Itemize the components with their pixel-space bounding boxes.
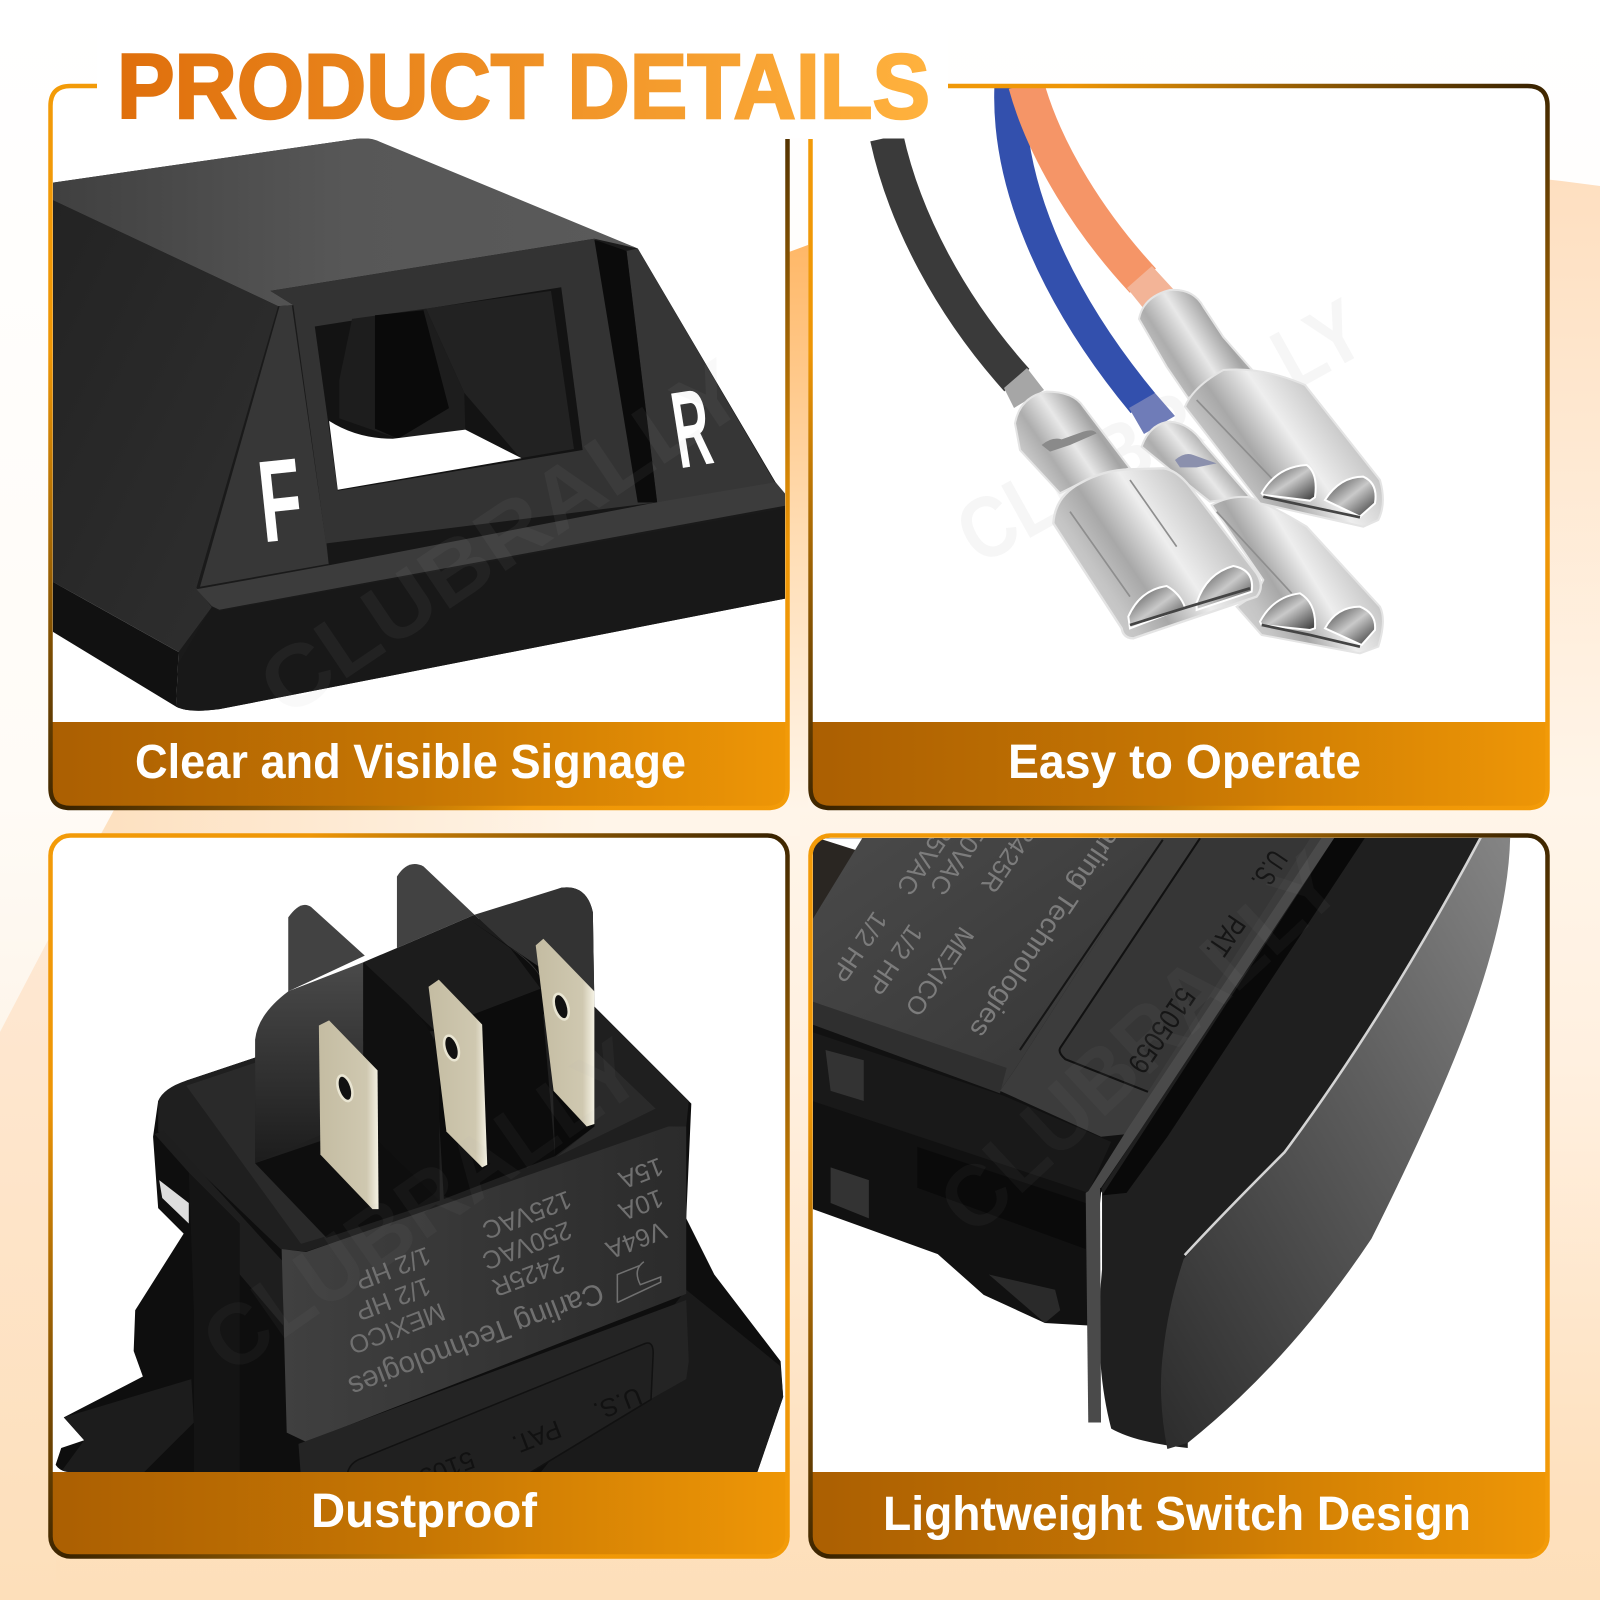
caption bar <box>52 722 786 806</box>
label text on switch: MEXICO <box>899 922 979 1021</box>
label text on switch: 2425R <box>975 820 1040 898</box>
caption text: Clear and Visible Signage <box>135 736 686 789</box>
label text on switch: 1/2 HP <box>352 1271 434 1326</box>
label text on switch: PAT. <box>1199 909 1252 965</box>
text faces <box>282 1127 686 1442</box>
letter R: R <box>664 366 719 492</box>
watermark: CLUBRALLY <box>242 341 762 735</box>
label text on switch: 15A <box>615 1152 667 1194</box>
label text on switch: 125VAC <box>478 1185 575 1244</box>
second body section <box>1000 836 1336 1137</box>
caption bar <box>52 1472 786 1556</box>
label text on switch: 1/2 HP <box>861 919 928 999</box>
connector: black <box>1004 368 1261 638</box>
label text on switch: 250VAC <box>924 807 999 900</box>
caption bar <box>812 1472 1546 1556</box>
label text on switch: 10A <box>615 1183 667 1226</box>
label text on switch: 5105059 <box>376 1445 478 1507</box>
main text face <box>812 836 1165 1091</box>
label text on switch: 1/2 HP <box>825 906 892 987</box>
label text on switch: 250VAC <box>478 1215 575 1275</box>
underside <box>812 1032 1111 1193</box>
side clip <box>155 1131 283 1326</box>
caption text: Lightweight Switch Design <box>883 1488 1471 1541</box>
illustration: switch bezel with F and R marks <box>53 138 788 735</box>
heading: product details: PRODUCT DETAILS <box>117 36 930 138</box>
panel: dustproof <box>50 836 788 1556</box>
caption text: Easy to Operate <box>1008 736 1361 789</box>
wire: orange <box>1026 84 1143 281</box>
connector: blue <box>1129 393 1383 653</box>
label text on switch: 2425R <box>488 1248 568 1302</box>
label text on switch: U.S. <box>589 1381 646 1425</box>
caption bar <box>812 722 1546 806</box>
watermark: CLUBRALLY <box>941 280 1380 583</box>
caption text: Dustproof <box>311 1485 538 1538</box>
label text on switch <box>825 804 1293 1079</box>
label text on switch: U.S. <box>1244 844 1293 895</box>
label text on switch <box>344 1152 670 1507</box>
label text on switch: V64A <box>602 1215 670 1264</box>
terminal walls <box>434 1014 555 1199</box>
watermark: CLUBRALLY <box>920 834 1360 1253</box>
panel: clear and visible signage <box>50 86 788 808</box>
illustration: three wires with spade connectors <box>887 84 1383 653</box>
label text on switch: 1/2 HP <box>352 1241 434 1295</box>
label text on switch: MEXICO <box>345 1297 449 1359</box>
rear fins <box>288 905 365 991</box>
icon: manufacturer logo <box>617 1262 661 1303</box>
panel: lightweight switch design <box>810 804 1548 1556</box>
label text on switch: 125VAC <box>891 807 966 900</box>
label text on switch: 5105059 <box>1121 981 1202 1079</box>
rocker face <box>1161 836 1510 1449</box>
panel: easy to operate <box>810 84 1548 808</box>
letter F: F <box>252 434 308 568</box>
terminals <box>319 1020 379 1209</box>
illustration: switch rear with terminals <box>51 864 783 1507</box>
watermark: CLUBRALLY <box>185 1020 658 1392</box>
connector: orange <box>1127 266 1383 527</box>
wire: blue <box>1010 87 1143 403</box>
label text on switch: Carling Technologies <box>964 804 1140 1044</box>
flange <box>1086 836 1336 1195</box>
label text on switch: Carling Technologies <box>344 1276 608 1403</box>
wire: black <box>887 138 1017 380</box>
top deck <box>158 1007 689 1252</box>
illustration: switch side view <box>810 804 1510 1449</box>
bezel <box>1099 836 1484 1448</box>
label text on switch: PAT. <box>508 1414 565 1458</box>
